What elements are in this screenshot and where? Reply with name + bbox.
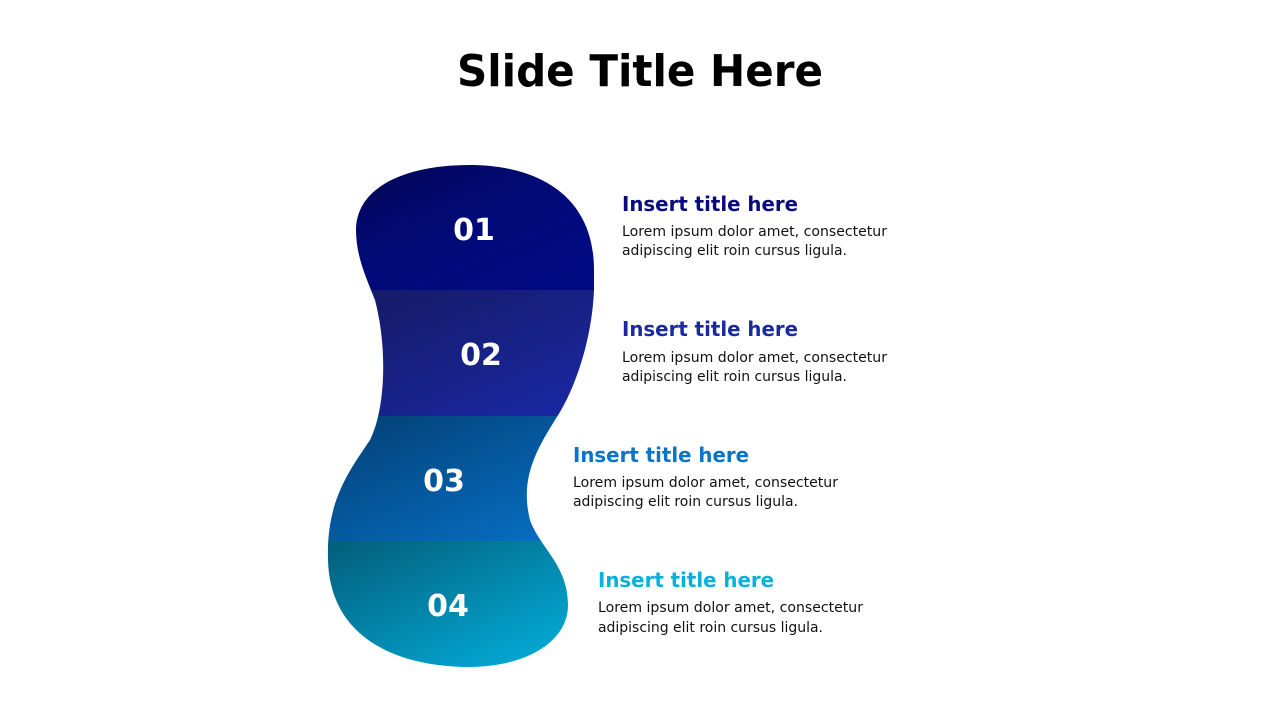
text block 4: Insert title here (598, 568, 774, 592)
text block 1: adipiscing elit roin cursus ligula. (622, 243, 847, 259)
text block 3: Lorem ipsum dolor amet, consectetur (573, 475, 838, 491)
segment 01 (356, 165, 594, 290)
text block 4: adipiscing elit roin cursus ligula. (598, 620, 823, 636)
segment 04 (328, 541, 568, 667)
title: Slide Title Here (457, 46, 823, 97)
text block 3: adipiscing elit roin cursus ligula. (573, 494, 798, 510)
text block 4 (598, 568, 863, 636)
number 01: 01 (453, 213, 495, 248)
text block 3 (573, 443, 838, 510)
text block 2: Lorem ipsum dolor amet, consectetur (622, 350, 887, 366)
number 02: 02 (460, 338, 502, 373)
text block 2 (622, 317, 887, 385)
text block 3: Insert title here (573, 443, 749, 467)
text block 1: Lorem ipsum dolor amet, consectetur (622, 224, 887, 240)
text block 2: Insert title here (622, 317, 798, 341)
blob shape with four segments (320, 160, 610, 671)
segment 02 (371, 290, 594, 416)
segment 03 (328, 416, 558, 541)
number 03: 03 (423, 464, 465, 499)
text block 1: Insert title here (622, 192, 798, 216)
text block 2: adipiscing elit roin cursus ligula. (622, 369, 847, 385)
text block 4: Lorem ipsum dolor amet, consectetur (598, 600, 863, 616)
text block 1 (622, 192, 887, 259)
number 04: 04 (427, 589, 469, 624)
